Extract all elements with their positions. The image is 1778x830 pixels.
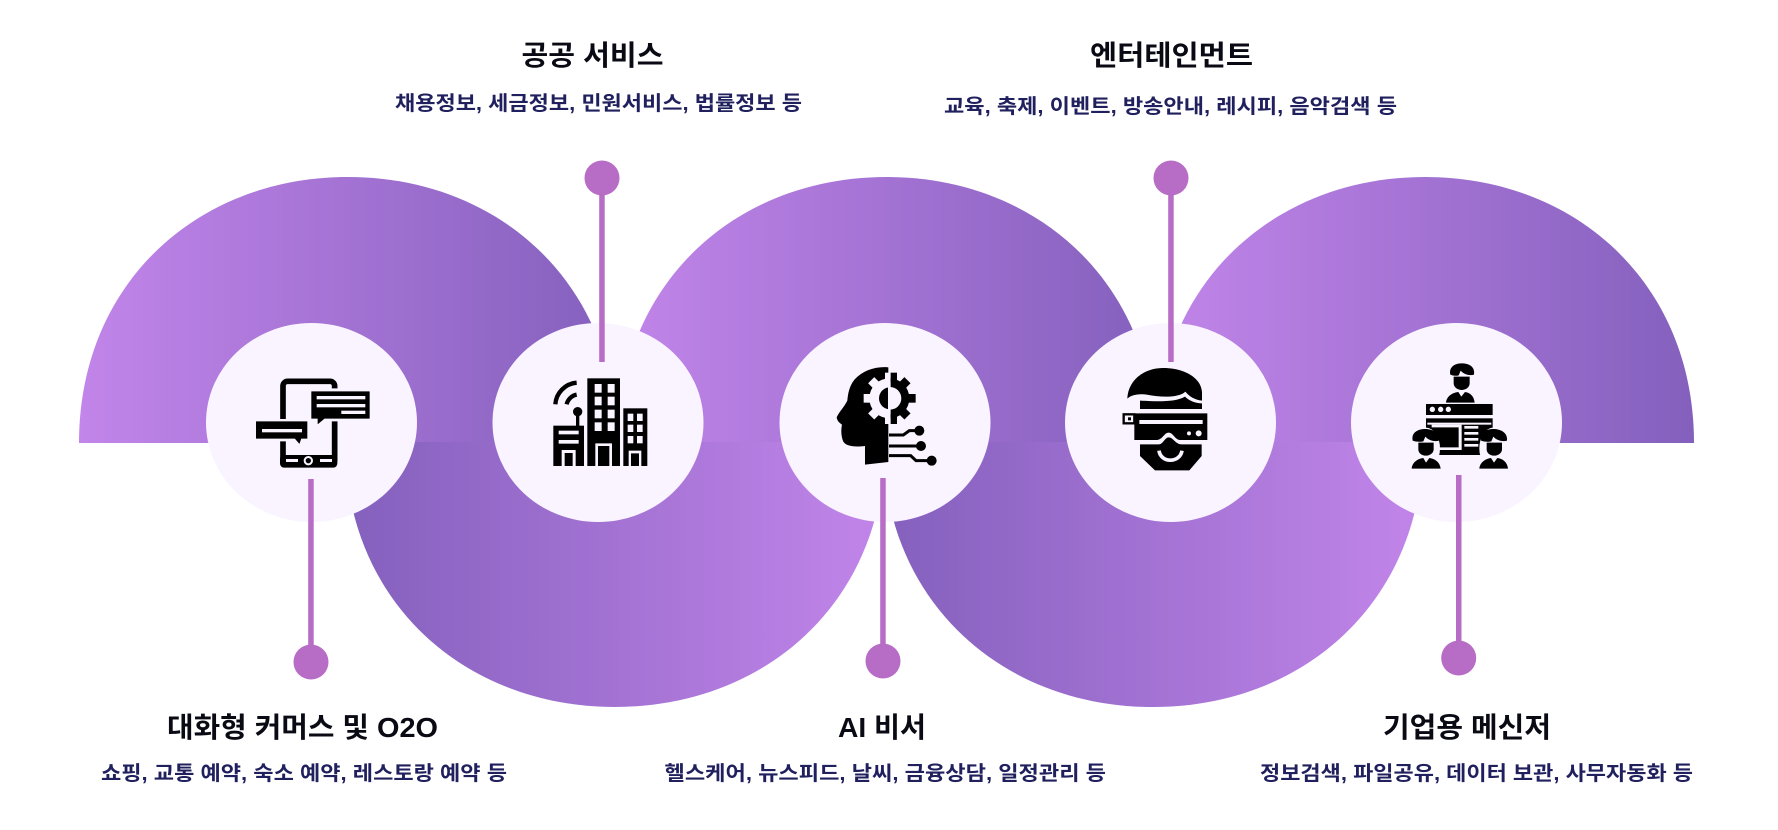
text: public services examples: 채용정보, 세금정보, 민원서비스, 법률정보 등: [395, 92, 802, 115]
heading: enterprise messenger: 기업용 메신저: [1383, 712, 1551, 743]
text: enterprise messenger examples: 정보검색, 파일공유, 데이터 보관, 사무자동화 등: [1260, 762, 1693, 785]
circle: public services: [492, 323, 704, 522]
icon: person wearing VR headset: [1124, 368, 1207, 470]
icon: phone with chat bubbles: [253, 381, 373, 468]
heading: AI assistant: AI 비서: [838, 712, 926, 743]
pin: commerce: [294, 479, 328, 680]
text: AI assistant examples: 헬스케어, 뉴스피드, 날씨, 금융상담, 일정관리 등: [664, 762, 1106, 785]
top arc 3: [1156, 177, 1694, 443]
heading: public services: 공공 서비스: [522, 40, 664, 71]
icon: team around a dashboard: [1412, 363, 1508, 469]
circle: entertainment: [1065, 323, 1276, 522]
bottom arc 1: [345, 442, 885, 707]
text: commerce examples: 쇼핑, 교통 예약, 숙소 예약, 레스토랑 예약 등: [101, 762, 507, 785]
pin: public services: [584, 160, 620, 362]
pin: AI assistant: [866, 478, 900, 678]
top arc 1: [79, 177, 617, 443]
pin: enterprise messenger: [1441, 475, 1476, 676]
heading: entertainment: 엔터테인먼트: [1090, 40, 1253, 71]
top arc 2: [618, 177, 1156, 443]
pin: entertainment: [1154, 160, 1188, 362]
circle: AI assistant: [780, 323, 990, 522]
circle: enterprise messenger: [1351, 323, 1562, 522]
bottom arc 2: [883, 442, 1423, 707]
heading: conversational commerce: 대화형 커머스 및 O2O: [167, 712, 438, 743]
icon: city buildings with antenna: [553, 378, 647, 466]
icon: AI head with gear and circuits: [837, 367, 937, 466]
text: entertainment examples: 교육, 축제, 이벤트, 방송안내, 레시피, 음악검색 등: [944, 95, 1397, 118]
circle: commerce: [206, 323, 417, 522]
